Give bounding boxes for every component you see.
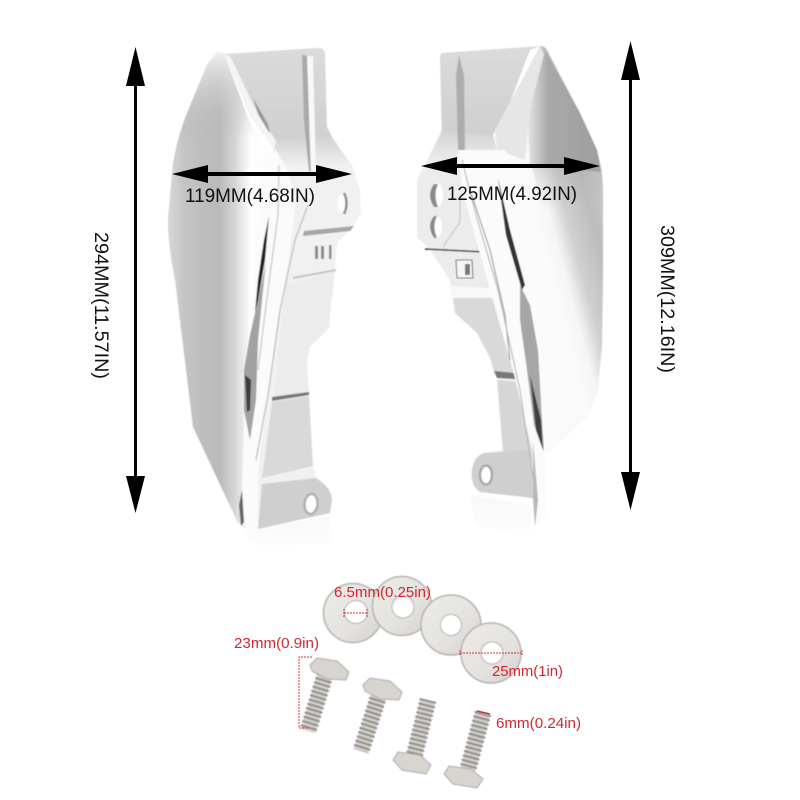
right mid-deflector panel (417, 46, 603, 540)
clip detail right (465, 264, 470, 275)
recess dark edge left (253, 98, 270, 134)
bolt 4 thread core (468, 713, 483, 769)
label: washer diameter: 25mm(1in) (492, 664, 563, 680)
bright band right (451, 286, 495, 298)
mounting slot left (338, 194, 346, 212)
bolt 1 thread core (308, 675, 325, 731)
side bracket plate right (417, 130, 535, 498)
washer 4 (461, 623, 521, 683)
bolt 4 (444, 713, 483, 788)
outer fin right (493, 46, 603, 455)
hole diameter line (344, 609, 367, 617)
shoulder highlight right (424, 130, 500, 170)
lower gray plate right (453, 298, 515, 378)
bolt 1 thread ridges (308, 675, 325, 731)
bolt 3 thread core (414, 700, 428, 757)
black fold line right (425, 249, 485, 252)
shoulder highlight left (274, 137, 351, 170)
chrome line A right (470, 190, 510, 360)
washer 1 hole (344, 600, 368, 624)
left head (172, 165, 208, 183)
gray channel right (520, 285, 544, 452)
washer 3 (421, 595, 481, 655)
bolt 3 thread ridges (414, 700, 428, 757)
top head (126, 47, 145, 86)
label: bolt length: 23mm(0.9in) (234, 636, 319, 652)
slot in tab right (480, 466, 492, 484)
black chrome streak right (498, 178, 525, 290)
left mid-deflector panel (168, 48, 361, 550)
bottom blade right (533, 440, 538, 527)
label: right height: 309MM(12.16IN) (656, 225, 677, 373)
outer fin left (168, 52, 274, 530)
chrome streak lower left (245, 375, 251, 412)
bolt length line (299, 657, 312, 728)
lower flange right (497, 380, 533, 452)
bolt 2 thread core (361, 695, 379, 751)
shaft (134, 70, 137, 490)
washer 3 hole (440, 614, 462, 636)
washer 2 hole (392, 596, 414, 618)
floor reflection left (245, 516, 332, 550)
label: right width: 125MM(4.92IN) (447, 184, 577, 205)
shaft (195, 172, 330, 176)
vertical rib left (302, 55, 313, 172)
bolt 1 head (310, 658, 349, 680)
light crease right (495, 46, 544, 160)
upper area fade right (532, 165, 603, 220)
bolt diameter tick (477, 711, 490, 714)
clip right (456, 260, 473, 278)
bottom dark tip left (239, 490, 244, 526)
recess bright edge left (224, 54, 276, 150)
bolt 4 head (444, 766, 483, 788)
chrome thin line left (256, 205, 308, 460)
top head (621, 41, 640, 80)
lower bracket plate left (252, 137, 361, 529)
dark upper area right (528, 50, 601, 172)
shaft (629, 65, 632, 485)
dimension arrow: left width (172, 165, 352, 183)
left head (421, 157, 457, 175)
slot edge upper right (430, 184, 438, 207)
slot edge lower right (430, 216, 437, 238)
mount slot lower right (430, 216, 442, 238)
mounting slot edge left (344, 193, 346, 214)
chrome line B right (462, 160, 535, 490)
hardware: bolts (308, 658, 483, 788)
chrome dark channel left (244, 262, 266, 440)
washer 1 (324, 584, 382, 642)
washer 2 (372, 576, 432, 636)
dimension arrow: left vertical height (126, 47, 145, 513)
channel dark core right (530, 375, 543, 450)
chrome edge line left (258, 165, 279, 370)
bottom head (621, 472, 640, 510)
lower shelf shade left (303, 226, 354, 236)
chrome white zone right (458, 150, 546, 527)
dimension arrow: right width (421, 157, 600, 175)
clip bars left (315, 245, 332, 259)
shaft (445, 164, 580, 168)
label: left width: 119MM(4.68IN) (185, 186, 315, 207)
fold line left (272, 392, 309, 401)
bolt 3 head (393, 752, 431, 774)
bolt 2 thread ridges (361, 695, 379, 751)
vertical rib right (456, 55, 465, 150)
bolt 4 thread ridges (468, 713, 483, 769)
upper flange shade left (274, 272, 334, 397)
dimension arrow: right vertical height (621, 41, 640, 510)
mount slot upper right (431, 183, 443, 207)
bolt 2 head (363, 678, 402, 700)
fold lines right (443, 200, 460, 247)
bottom head (126, 476, 145, 513)
washer diameter line (460, 650, 522, 656)
hardware: washers (324, 576, 521, 683)
bolt tab right (472, 450, 533, 498)
top plate right (440, 46, 540, 138)
second fold left (293, 270, 336, 278)
lower flange shade left (262, 396, 313, 478)
bolt 1 (308, 658, 349, 731)
slot in tab left (304, 493, 318, 515)
red measurement lines (299, 609, 522, 728)
label: bolt diameter: 6mm(0.24in) (496, 716, 581, 732)
rib highlight left (307, 56, 316, 176)
right head (564, 157, 600, 175)
fold line right (494, 371, 516, 379)
label: left height: 294MM(11.57IN) (90, 232, 111, 379)
chrome black streak left (255, 216, 269, 312)
floor reflection right (470, 495, 532, 540)
bolt 3 (393, 700, 431, 774)
fin top highlight left (176, 52, 274, 170)
washer 4 hole (481, 642, 503, 664)
chrome white zone left (241, 150, 296, 530)
right head (316, 165, 352, 183)
label: hole diameter: 6.5mm(0.25in) (334, 585, 431, 601)
bolt 2 (361, 678, 402, 751)
top plate left (224, 48, 332, 141)
bolt tab left (258, 478, 332, 529)
